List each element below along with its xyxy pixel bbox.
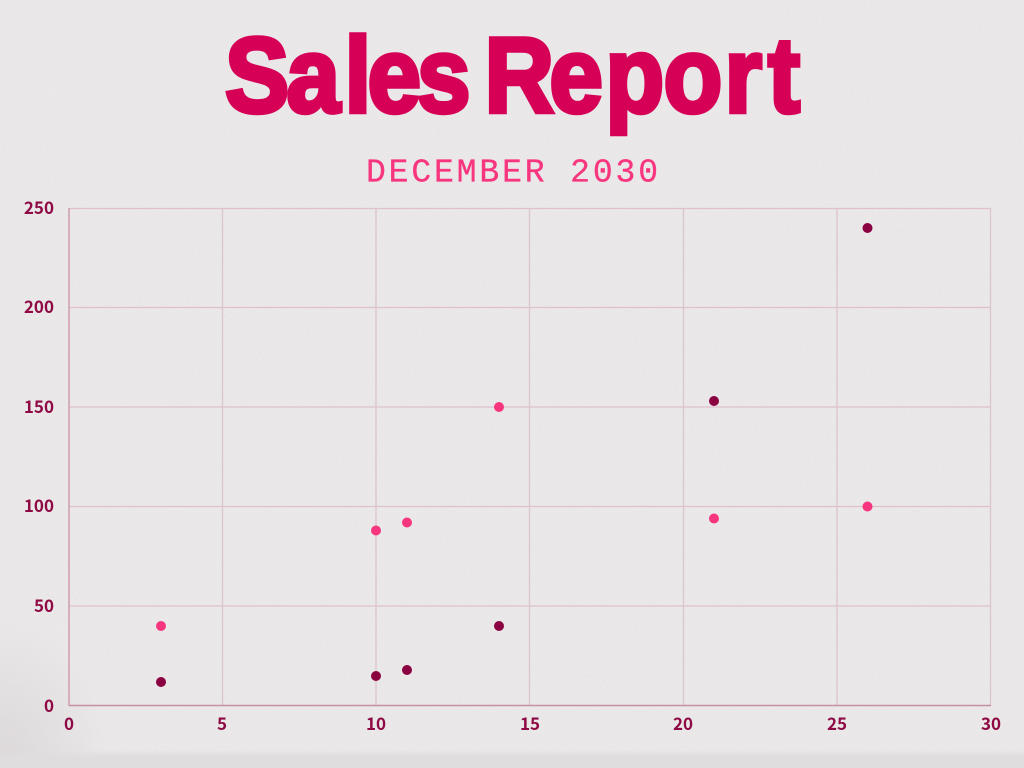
x axis labels: 0 [64, 710, 74, 735]
x axis labels: 15 [520, 710, 540, 735]
y axis labels [24, 194, 54, 717]
y axis labels: 150 [24, 393, 54, 418]
scatter chart [24, 194, 1001, 735]
x axis labels [64, 710, 1001, 735]
series: dark points [156, 223, 872, 687]
title: Sales Report [225, 15, 800, 135]
x axis labels: 25 [827, 710, 847, 735]
y axis labels: 100 [24, 492, 54, 517]
y axis labels: 50 [34, 592, 54, 617]
chart gridlines [69, 208, 991, 706]
subtitle: DECEMBER 2030 [366, 154, 658, 192]
series: pink points [156, 402, 872, 631]
y axis labels: 200 [24, 293, 54, 318]
x axis labels: 5 [217, 710, 227, 735]
x axis labels: 10 [366, 710, 386, 735]
x axis labels: 30 [981, 710, 1001, 735]
y axis labels: 0 [44, 692, 54, 717]
y axis labels: 250 [24, 194, 54, 219]
x axis labels: 20 [673, 710, 693, 735]
